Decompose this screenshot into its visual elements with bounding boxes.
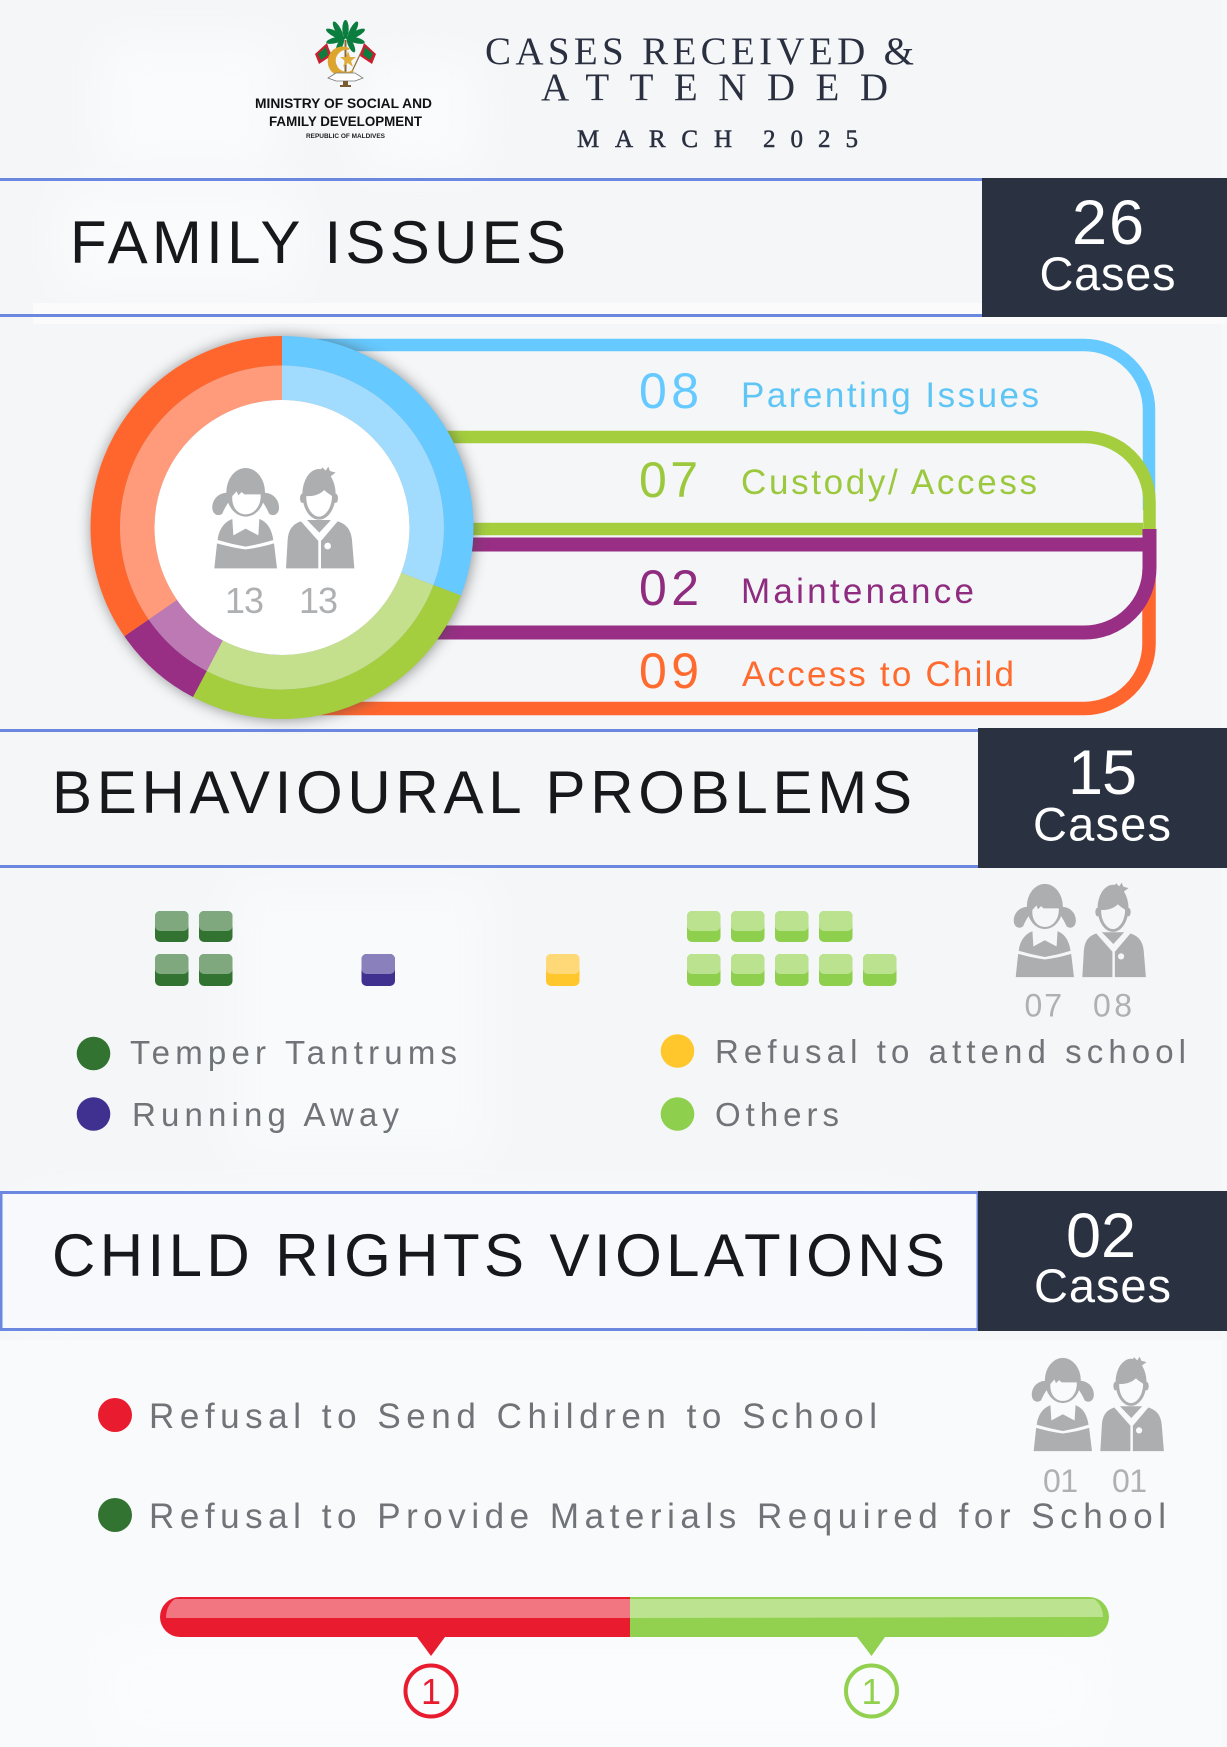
- icon: girl and boy, child rights: 01: [1112, 1463, 1147, 1499]
- family issues breakdown: 07: [639, 452, 698, 508]
- legend: behavioural problems: [77, 1033, 1186, 1133]
- icon: girl and boy, behavioural: [1014, 883, 1146, 1024]
- family issues breakdown: [639, 363, 1039, 699]
- legend: behavioural problems: Others: [715, 1096, 839, 1133]
- cases box: 15: 15: [1068, 738, 1137, 808]
- cases box: 02: [978, 1191, 1227, 1331]
- main heading: ATTENDED: [541, 66, 888, 109]
- donut chart: [91, 336, 475, 720]
- family issues breakdown: Access to Child: [742, 655, 1014, 694]
- cases box: 26: Cases: [1040, 247, 1176, 300]
- family issues breakdown: 08: [639, 363, 699, 419]
- family issues breakdown: Parenting Issues: [741, 376, 1039, 415]
- cases box: 26: 26: [1072, 188, 1144, 258]
- cases box: 15: Cases: [1033, 798, 1171, 850]
- red segment: [160, 1597, 630, 1656]
- legend: child rights violations: Refusal to Send Children to School: [149, 1397, 877, 1436]
- date: MARCH: [577, 126, 732, 153]
- title: BEHAVIOURAL PROBLEMS: [52, 759, 912, 826]
- main heading: CASES RECEIVED &: [485, 30, 914, 73]
- logo: ministry emblem and name: [255, 20, 432, 140]
- family issues breakdown: 02: [639, 560, 699, 616]
- legend: behavioural problems: Temper Tantrums: [130, 1034, 457, 1071]
- date: 2025: [763, 126, 858, 153]
- gender counts: 13: [225, 580, 264, 621]
- emblem: [315, 20, 376, 87]
- section header: family issues: [0, 178, 1227, 317]
- others blocks: [687, 911, 896, 986]
- title: CHILD RIGHTS VIOLATIONS: [52, 1222, 945, 1289]
- family issues breakdown: Maintenance: [741, 572, 974, 611]
- logo: ministry emblem and name: FAMILY DEVELOPMENT: [269, 114, 423, 129]
- gender counts: 13: [299, 580, 338, 621]
- title: FAMILY ISSUES: [70, 209, 566, 276]
- unit blocks chart: [155, 911, 896, 986]
- gender counts: [225, 580, 338, 621]
- cases box: 26: [982, 178, 1227, 317]
- ministry name: MINISTRY OF SOCIAL AND: [255, 96, 432, 111]
- logo: ministry emblem and name: REPUBLIC OF MALDIVES: [306, 133, 386, 140]
- cases box: 02: 02: [1066, 1201, 1136, 1271]
- running away block: [362, 954, 395, 986]
- connector lines: [290, 345, 1150, 708]
- legend: child rights violations: Refusal to Provide Materials Required for School: [149, 1497, 1166, 1536]
- value marker: red: [406, 1666, 456, 1716]
- legend: child rights violations: [98, 1397, 1166, 1536]
- section header: behavioural problems: [0, 728, 1227, 868]
- temper tantrums blocks: [155, 911, 232, 986]
- family issues breakdown: 09: [639, 643, 699, 699]
- split bar chart: [160, 1597, 1109, 1716]
- value marker: green: 1: [861, 1671, 882, 1712]
- icon: girl and boy, behavioural: 08: [1093, 988, 1132, 1024]
- cases box: 15: [978, 728, 1227, 868]
- icon: girl and boy, child rights: 01: [1043, 1463, 1078, 1499]
- green segment: [630, 1597, 1109, 1656]
- legend: behavioural problems: Running Away: [132, 1096, 400, 1133]
- icon: girl and boy, behavioural: 07: [1024, 988, 1062, 1024]
- family issues breakdown: Custody/ Access: [741, 463, 1037, 502]
- main heading: [485, 30, 914, 153]
- icon: girl and boy: [212, 467, 354, 568]
- value marker: green: [846, 1666, 897, 1716]
- cases box: 02: Cases: [1034, 1259, 1171, 1312]
- icon: girl and boy, child rights: [1032, 1357, 1164, 1499]
- value marker: red: 1: [421, 1671, 441, 1712]
- date: [577, 126, 858, 153]
- legend: behavioural problems: Refusal to attend school: [715, 1033, 1186, 1070]
- refusal to attend school block: [546, 954, 580, 986]
- section header: child rights violations: [1, 1191, 1227, 1331]
